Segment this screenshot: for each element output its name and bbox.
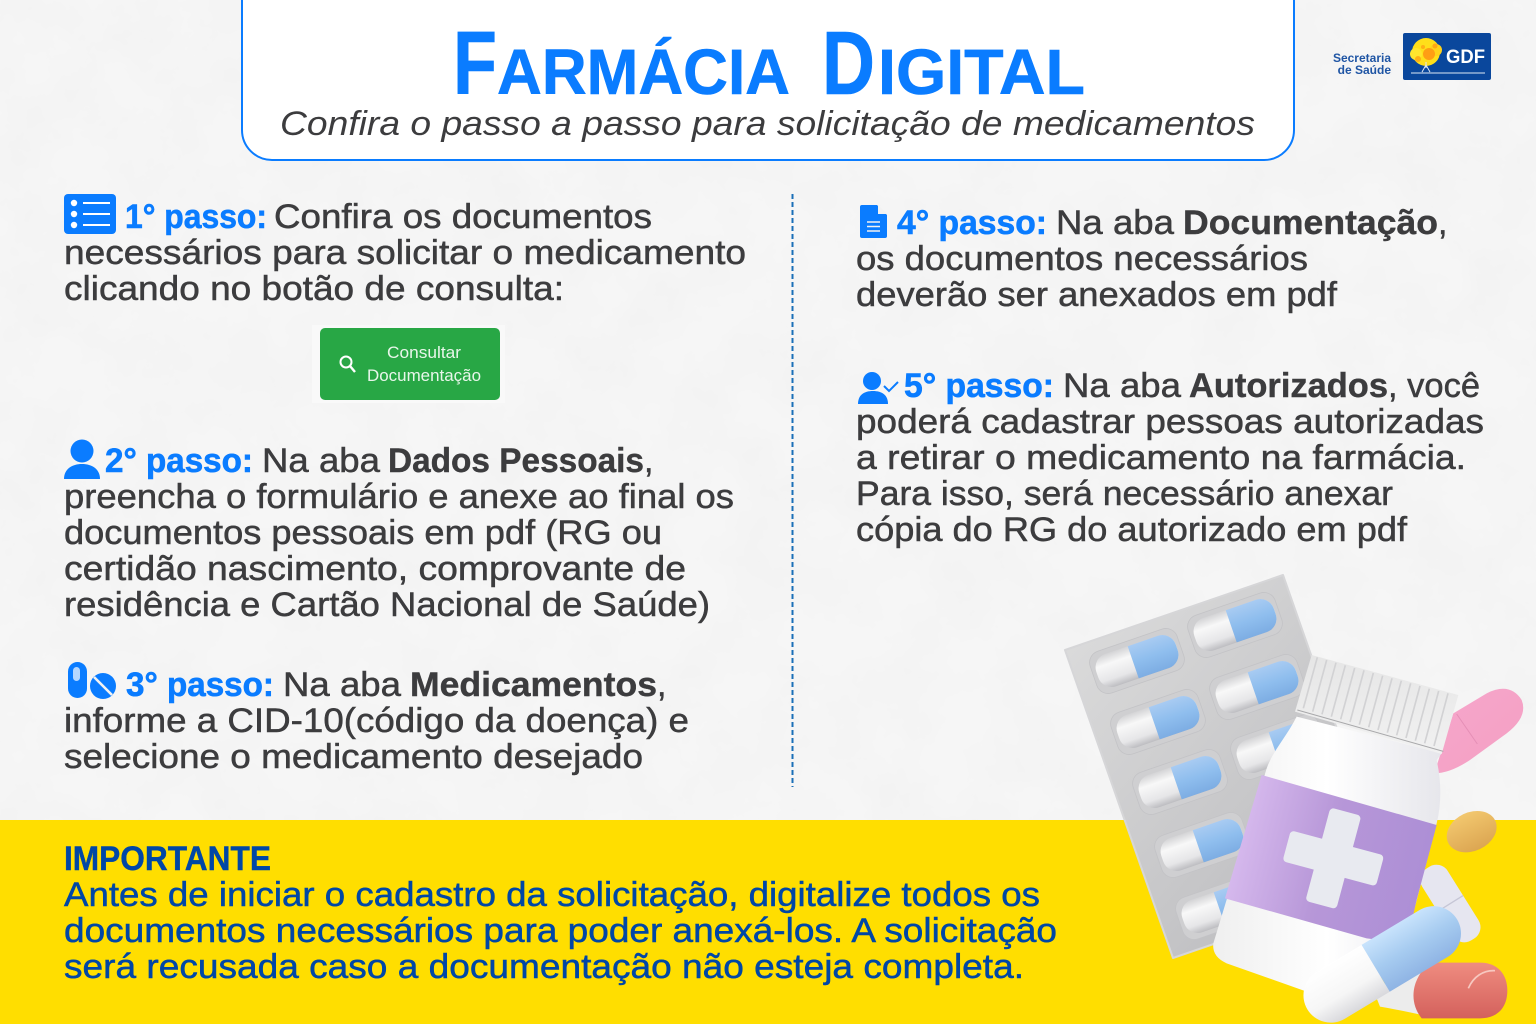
step 3 text: informe a CID-10(código da doença) e [64,702,689,740]
step 2 [64,440,734,624]
button: consultar documentação [312,325,505,403]
bottle body [1213,717,1442,993]
title [453,14,1085,114]
icon: document [860,205,887,238]
step 4 text: Documentação [1183,204,1438,242]
bottle cap [1295,655,1458,754]
icon: authorised person [858,372,898,404]
step 5 text: , você [1388,367,1480,405]
button: consultar documentação: Documentação [367,367,481,385]
step 3 text: Na aba [283,666,401,704]
step 1 text: necessários para solicitar o medicamento [64,234,746,272]
header panel [242,0,1294,160]
step 1 text [64,198,746,308]
step 1 text: clicando no botão de consulta: [64,270,564,308]
title: F [453,14,497,114]
button: consultar documentação: Consultar [387,344,462,362]
step 2 text: Dados Pessoais [388,442,644,480]
step 5 text: poderá cadastrar pessoas autorizadas [856,403,1484,441]
step 2 text [64,442,734,624]
bottle label [1225,775,1437,943]
step 5 text: a retirar o medicamento na farmácia. [856,439,1466,477]
subtitle: Confira o passo a passo para solicitação de medicamentos [280,105,1255,143]
step 2 text: documentos pessoais em pdf (RG ou [64,514,662,552]
step 3 text [64,666,689,776]
step 5 text: cópia do RG do autorizado em pdf [856,511,1408,549]
step 1 text: 1° passo: [125,198,267,236]
step 5 [856,367,1484,549]
blister pack [1065,575,1391,958]
step 2 text: certidão nascimento, comprovante de [64,550,686,588]
white tablet [1415,860,1486,947]
title: D [822,14,875,114]
title: IGITAL [878,36,1085,108]
step 5 text [856,367,1484,549]
icon: list [64,194,116,234]
step 4 text: Na aba [1056,204,1174,242]
logo: Secretaria de Saúde GDF: GDF [1446,47,1485,68]
step 2 text: , [644,442,653,480]
step 5 text: Para isso, será necessário anexar [856,475,1393,513]
step 3 text: Medicamentos [410,666,657,704]
title: ARMÁCIA [497,36,790,108]
step 3 text: 3° passo: [126,666,274,704]
callout: importante: documentos necessários para poder anexá-los. A solicitação [64,912,1057,950]
pink pill [1434,689,1523,773]
callout: importante: será recusada caso a documentação não esteja completa. [64,948,1024,986]
step 3 [64,662,689,776]
cross [1274,799,1393,918]
step 4 text: deverão ser anexados em pdf [856,276,1338,314]
big capsule [1293,896,1471,1024]
step 4 text: 4° passo: [897,204,1047,242]
step 4 text: os documentos necessários [856,240,1308,278]
step 5 text: 5° passo: [904,367,1054,405]
logo: Secretaria de Saúde GDF: Secretaria [1333,51,1391,65]
step 1 [64,194,746,403]
step 2 text: 2° passo: [105,442,253,480]
illustration: medicines [1065,575,1523,1024]
callout: importante: Antes de iniciar o cadastro da solicitação, digitalize todos os [64,876,1040,914]
step 5 text: Autorizados [1189,367,1388,405]
yellow pill [1440,803,1503,860]
logo: Secretaria de Saúde GDF [1333,33,1491,80]
loose pills and bottle [1213,655,1523,1024]
icon: person [64,440,100,479]
step 2 text: residência e Cartão Nacional de Saúde) [64,586,710,624]
red capsule [1373,963,1507,1018]
step 4 text: , [1438,204,1447,242]
step 4 [856,204,1447,314]
step 3 text: , [657,666,666,704]
step 2 text: preencha o formulário e anexe ao final os [64,478,734,516]
step 4 text [856,204,1447,314]
callout: importante: IMPORTANTE [64,840,271,878]
step 5 text: Na aba [1063,367,1181,405]
icon: pills [68,662,116,699]
logo: Secretaria de Saúde GDF: de Saúde [1338,63,1391,77]
callout: importante [64,840,1057,986]
step 1 text: Confira os documentos [274,198,652,236]
step 2 text: Na aba [262,442,380,480]
step 3 text: selecione o medicamento desejado [64,738,643,776]
yellow band [0,820,1536,1024]
